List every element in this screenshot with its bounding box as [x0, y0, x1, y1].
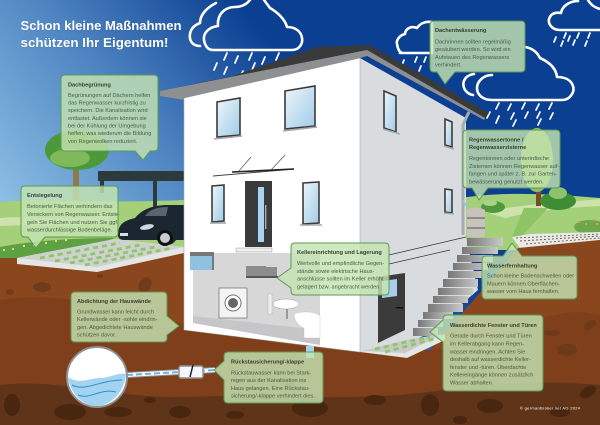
carport	[98, 171, 184, 217]
callout: Kellereinrichtung und Lagerung: anschlüsse sollten im Keller erhöht	[297, 276, 384, 282]
callout: Wasserdichte Fenster und Türen: fenster und -türen. Überdachte	[450, 364, 526, 371]
callout: Dachbegrünung: von Regenwolken reduziert.	[68, 139, 138, 145]
callout: Dachbegrünung: bei der Kühlung der Umgebung	[68, 124, 146, 130]
callout: Regenwassertonne: Regenwassertonne /	[469, 138, 524, 144]
callout: Rückstausicherung: sicherung/-klappe verhindert dies.	[231, 394, 315, 400]
callout: Wasserfernhaltung: Wasserfernhaltung	[487, 264, 538, 270]
downpipe	[463, 112, 469, 235]
background landscape left	[0, 130, 184, 258]
callout: Wasserfernhaltung: wasser vom Haus fernhalten.	[486, 289, 560, 295]
callout: Regenwassertonne: Zisternen können Regenwasser auf-	[469, 164, 559, 170]
background landscape right	[460, 128, 600, 250]
callout: Rückstausicherung: Rückstausicherung/-klappe	[231, 360, 304, 366]
callout: Wasserfernhaltung: Mauern können Oberflächen-	[487, 282, 560, 288]
callout: Regenwassertonne	[463, 130, 560, 200]
car	[118, 205, 184, 246]
callout: Entsiegelung: wasserdurchlässige Bodenbeläge.	[26, 228, 113, 234]
callout: Kellereinrichtung und Lagerung: Kellereinrichtung und Lagerung	[297, 250, 382, 256]
windows	[210, 86, 454, 225]
washing machine	[219, 288, 247, 318]
callout: Rückstausicherung: Rückstauwasser kann bei Stark-	[231, 370, 311, 376]
front wall	[184, 58, 360, 352]
callout: Wasserfernhaltung: Schon kleine Bodenschwellen oder	[487, 274, 574, 280]
clouds and rain	[190, 0, 600, 126]
callout: Entsiegelung: geln Sie Flächen und nutzen Sie ggf.	[27, 220, 119, 226]
roof	[160, 45, 489, 118]
permeable paving	[17, 239, 184, 272]
callout: Regenwassertonne: bewässerung genutzt werden.	[469, 180, 544, 186]
callout: Wasserdichte Fenster und Türen: Wasserdichte Fenster und Türen	[450, 323, 537, 329]
stairs	[413, 238, 503, 336]
callout: Wasserdichte Fenster und Türen: Wasser abhalten.	[450, 380, 494, 386]
front door	[236, 181, 272, 252]
callout: Abdichtung der Hauswände: Kellerwände oder -sohle eindrin-	[77, 317, 158, 323]
callout: Wasserdichte Fenster und Türen: im Kellerabgang kann Regen-	[450, 342, 524, 348]
callout: Dachentwässerung: verhindert.	[435, 62, 462, 68]
callout: Dachentwässerung: gesäubert werden. So wird ein	[435, 47, 511, 53]
callout: Kellereinrichtung und Lagerung	[277, 243, 389, 295]
title: Schon kleine Maßnahmen	[20, 19, 182, 33]
callout: Regenwassertonne: Regenwasserzisterne	[469, 145, 526, 151]
entrance canopy	[213, 155, 294, 176]
callout: Wasserfernhaltung	[482, 243, 577, 299]
basement window	[190, 252, 214, 270]
title: schützen Ihr Eigentum!	[20, 36, 168, 50]
callout: Abdichtung der Hauswände	[71, 292, 179, 342]
callout: Dachbegrünung: das Regenwasser kurzfristig zu	[68, 100, 146, 106]
railing	[389, 237, 466, 264]
callout: Abdichtung der Hauswände: gen. Abgedichtete Hauswände	[77, 325, 153, 331]
callout: Dachbegrünung: helfen, was wiederum die Bildung	[68, 131, 151, 137]
callout: Kellereinrichtung und Lagerung: gelagert bzw. angebracht werden.	[297, 284, 381, 290]
callout: Dachentwässerung	[430, 21, 525, 84]
callout: Abdichtung der Hauswände: schützen davor.	[77, 332, 117, 338]
sink and toilet	[268, 294, 320, 338]
callout: Dachbegrünung: Dachbegrünung	[68, 82, 111, 88]
callout: Dachentwässerung: Dachrinnen sollten regelmäßig	[435, 40, 511, 46]
callout: Wasserdichte Fenster und Türen: deshalb auf wasserdichte Keller-	[450, 357, 531, 363]
storage boxes	[246, 266, 278, 278]
callout: Entsiegelung: Versickern von Regenwasser. Entsie-	[27, 212, 120, 218]
callout: Wasserdichte Fenster und Türen	[430, 315, 543, 391]
basement floor	[193, 316, 320, 345]
copyright: © germanBroker.net AG 2024	[520, 406, 581, 410]
basement door	[378, 273, 405, 343]
callout: Regenwassertonne: Regentonnen oder unterirdische	[469, 156, 549, 162]
basement entrance paving	[360, 334, 445, 358]
callout: Entsiegelung: Entsiegelung	[27, 193, 63, 199]
callout: Abdichtung der Hauswände: Grundwasser kann leicht durch	[77, 310, 154, 316]
basement room	[193, 253, 320, 345]
callout: Regenwassertonne: fangen und später z. B. zur Garten-	[469, 172, 557, 178]
callout: Wasserdichte Fenster und Türen: wasser eindringen. Achten Sie	[449, 350, 525, 356]
callout: Dachentwässerung: Dachentwässerung	[435, 28, 487, 34]
callout: Dachbegrünung	[61, 75, 158, 160]
callout: Entsiegelung: Betonierte Flächen verhindern das	[27, 204, 113, 210]
callout: Kellereinrichtung und Lagerung: stände sowie elektrische Haus-	[297, 269, 375, 275]
callout: Rückstausicherung: Haus gelangen. Eine Rückstau-	[231, 386, 310, 392]
callout: Wasserdichte Fenster und Türen: Gerade durch Fenster und Türen	[450, 334, 532, 340]
callout: Rückstausicherung	[214, 352, 323, 403]
drain pipe	[127, 346, 314, 378]
water magnifier	[67, 347, 127, 407]
callout: Dachbegrünung: entlastet. Außerdem können sie	[68, 116, 147, 122]
ground layers	[0, 240, 600, 425]
side wall	[360, 58, 478, 352]
callout: Dachentwässerung: Aufstauen des Regenwassers	[435, 55, 510, 61]
rain barrel	[463, 200, 485, 238]
callout: Kellereinrichtung und Lagerung: Wertvolle und empfindliche Gegen-	[297, 261, 384, 267]
callout: Entsiegelung	[21, 186, 120, 248]
callout: Wasserdichte Fenster und Türen: Kellereingänge können zusätzlich	[450, 372, 533, 378]
callout: Dachbegrünung: Begrünungen auf Dächern helfen	[68, 93, 150, 99]
callout: Abdichtung der Hauswände: Abdichtung der Hauswände	[77, 299, 151, 305]
callout: Rückstausicherung: regen aus der Kanalisation ins	[231, 378, 306, 384]
callout: Dachbegrünung: speichern. Die Kanalisation wird	[68, 108, 148, 114]
house	[160, 45, 489, 352]
title	[20, 19, 182, 50]
